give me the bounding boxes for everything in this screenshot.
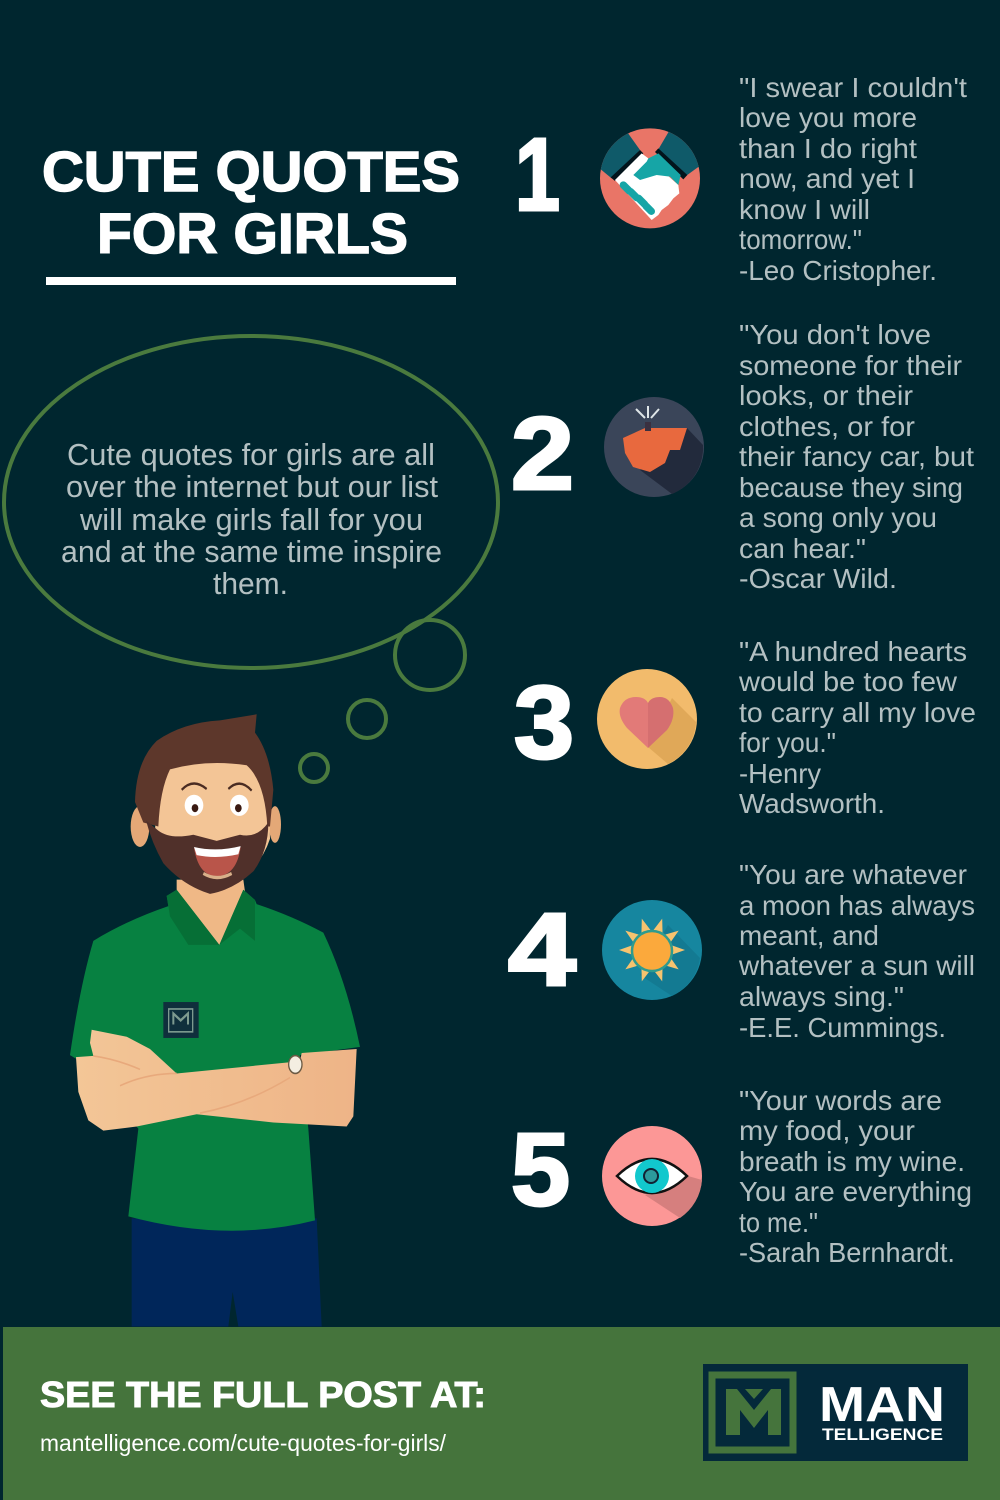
quote 2: looks, or their [739,380,913,411]
quote 3: Wadsworth. [739,788,885,819]
quote 5: "Your words are [739,1085,942,1116]
title: CUTE QUOTES [42,140,460,204]
quote 5 [739,1085,972,1268]
logo: TELLIGENCE [822,1425,943,1444]
intro text: and at the same time inspire [61,534,442,569]
icon: sun [602,900,702,1000]
icon: handshake [600,128,700,228]
quote 5: You are everything [739,1176,972,1207]
number 3: 3 [514,665,574,780]
intro text: will make girls fall for you [79,502,423,537]
quote 5: -Sarah Bernhardt. [739,1237,955,1268]
quote 3: "A hundred hearts [739,636,967,667]
quote 4 [738,859,975,1043]
logo: MAN [819,1378,945,1432]
quote 3: -Henry [739,758,821,789]
quote 4: whatever a sun will [738,950,975,981]
quote 2: "You don't love [739,319,931,350]
intro text: Cute quotes for girls are all [67,437,435,472]
quote 1: now, and yet I [739,163,915,194]
quote 4: always sing." [739,981,904,1012]
quote 3: to carry all my love [739,697,976,728]
quote 4: a moon has always [739,890,975,921]
number 2: 2 [511,396,574,511]
quote 4: meant, and [739,920,879,951]
icon: whistle [604,397,704,497]
quote 2: can hear." [739,533,866,564]
quote 5: to me." [739,1207,818,1238]
quote 1: tomorrow." [739,224,862,255]
quote 1: -Leo Cristopher. [739,255,937,286]
number 5: 5 [511,1112,570,1227]
intro text [61,437,442,601]
footer band [3,1327,1000,1500]
quote 1: "I swear I couldn't [739,72,967,103]
quote 2: their fancy car, but [739,441,974,472]
intro text: over the internet but our list [66,469,438,504]
quote 5: breath is my wine. [739,1146,965,1177]
number 4: 4 [508,892,576,1007]
title: FOR GIRLS [97,202,408,266]
quote 2: -Oscar Wild. [739,563,897,594]
quote 1: love you more [739,102,917,133]
quote 5: my food, your [739,1115,915,1146]
icon: eye [602,1126,702,1226]
quote 2: clothes, or for [739,411,915,442]
man illustration [70,714,360,1327]
quote 3 [738,636,976,819]
icon: heart [597,669,697,769]
number 1: 1 [515,117,560,232]
footer heading: SEE THE FULL POST AT: [40,1374,486,1415]
quote 3: would be too few [738,666,958,697]
quote 3: for you." [739,727,836,758]
quote 4: "You are whatever [739,859,967,890]
logo [703,1364,968,1461]
quote 4: -E.E. Cummings. [739,1012,946,1043]
quote 1: know I will [739,194,870,225]
quote 2: a song only you [739,502,937,533]
quote 2 [739,319,974,594]
intro text: them. [213,566,288,601]
footer url: mantelligence.com/cute-quotes-for-girls/ [40,1430,447,1456]
thought bubble [4,336,498,782]
title [42,140,460,285]
quote 1 [739,72,967,286]
quote 2: because they sing [739,472,963,503]
quote 2: someone for their [739,350,962,381]
quote 1: than I do right [739,133,917,164]
